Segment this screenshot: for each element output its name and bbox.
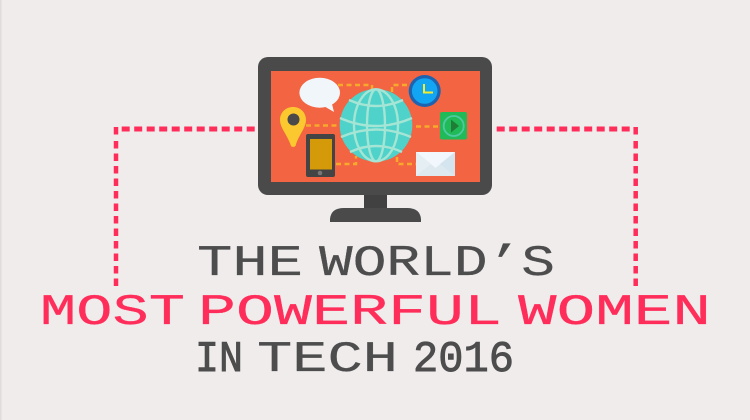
icon: globe <box>340 89 412 162</box>
icon: clock <box>409 75 441 107</box>
title line 3: 2016 <box>413 335 514 385</box>
title line 2: WOMEN <box>518 288 711 338</box>
monitor stand <box>330 194 421 222</box>
icon: smartphone <box>306 134 335 177</box>
title line 1 <box>197 239 555 289</box>
icon: envelope <box>416 152 455 176</box>
monitor screen <box>271 71 480 182</box>
orange dashed network lines <box>306 85 440 164</box>
icon: location pin <box>280 107 306 147</box>
title line 3: IN <box>195 335 243 385</box>
title line 2: MOST <box>40 288 185 338</box>
dashed connector right <box>497 127 636 286</box>
dashed connector left <box>116 127 256 286</box>
monitor <box>258 57 492 222</box>
title line 2: POWERFUL <box>198 288 502 338</box>
monitor body <box>258 57 492 195</box>
title line 3: TECH <box>257 335 398 385</box>
title line 3 <box>195 335 514 385</box>
icon: speech bubble <box>299 78 340 112</box>
title line 1: WORLD’S <box>319 239 555 289</box>
title line 2 <box>40 288 711 338</box>
title <box>40 239 711 385</box>
icon: play button <box>440 112 467 140</box>
title line 1: THE <box>197 239 303 289</box>
